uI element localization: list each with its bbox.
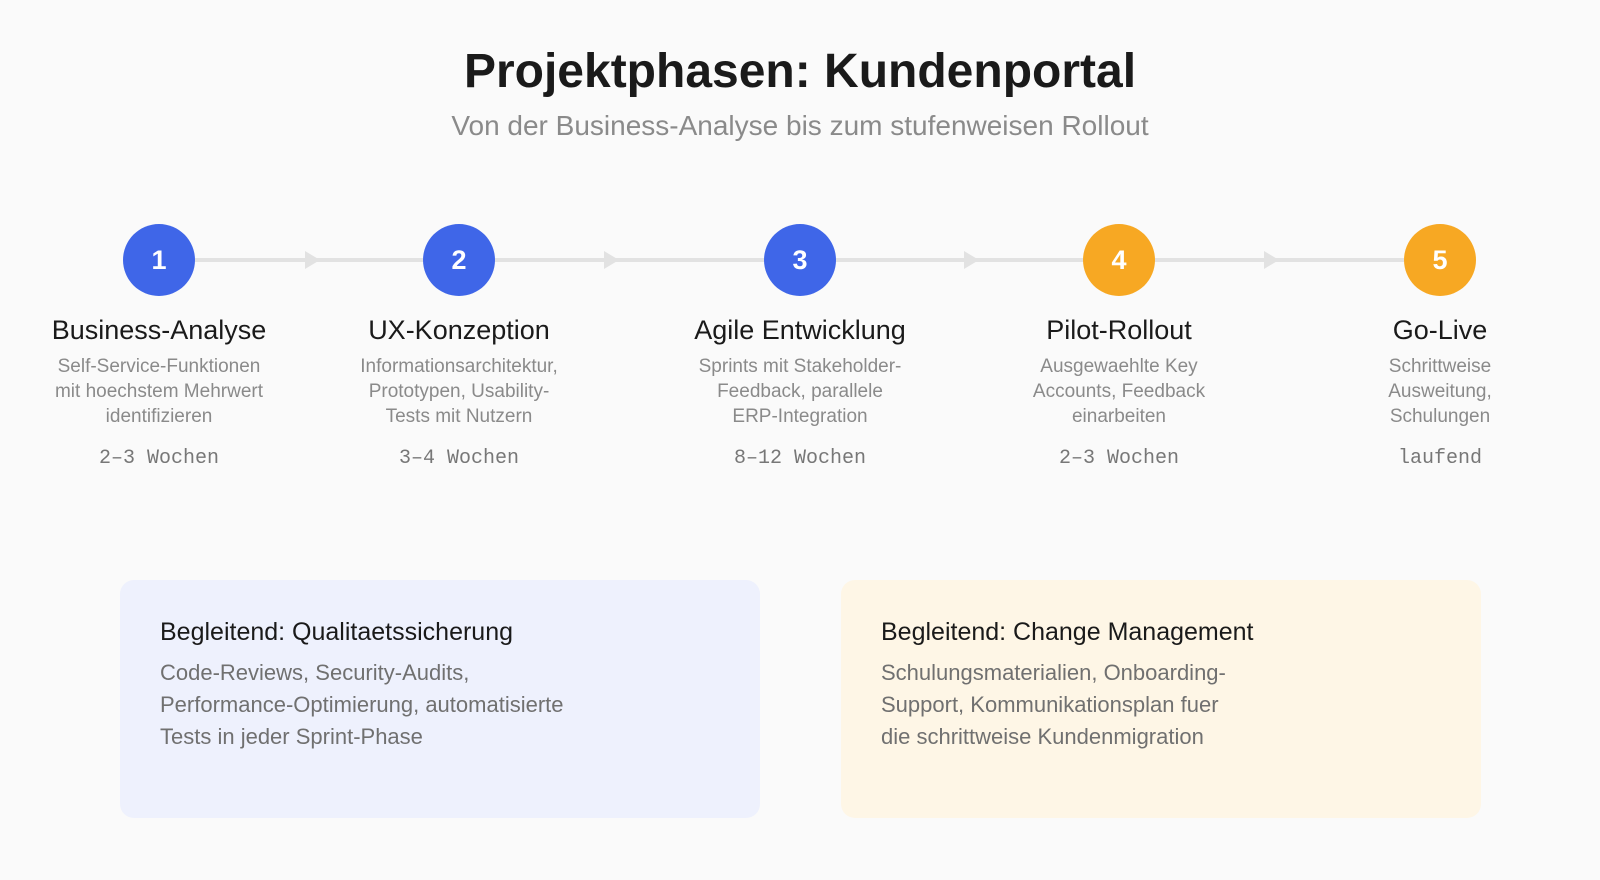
step 1: Business-Analyse <box>52 315 266 345</box>
circle 3: 3 <box>792 245 808 275</box>
step 3: Feedback, parallele <box>717 381 883 402</box>
step 4: Accounts, Feedback <box>1033 381 1205 402</box>
circle 1: 1 <box>151 245 167 275</box>
title: Projektphasen: Kundenportal <box>464 45 1136 98</box>
circle 5 <box>1404 224 1476 296</box>
subtitle: Von der Business-Analyse bis zum stufenweisen Rollout <box>451 110 1149 141</box>
step 2: Prototypen, Usability- <box>369 381 549 402</box>
step 2 <box>360 315 558 470</box>
step 1: mit hoechstem Mehrwert <box>55 381 263 402</box>
step 3: Agile Entwicklung <box>694 315 906 345</box>
panel: change management: Schulungsmaterialien, Onboarding-Support, Kommunikationsplan fuer die schrittweise Kundenmigration <box>881 660 1226 749</box>
step 2: Informationsarchitektur, <box>360 356 558 377</box>
step 5: Ausweitung, <box>1388 381 1492 402</box>
step 5: laufend <box>1398 447 1482 470</box>
circle 4: 4 <box>1111 245 1127 275</box>
circle 5: 5 <box>1432 245 1448 275</box>
step 3: 8–12 Wochen <box>734 447 866 470</box>
panel: change management: Begleitend: Change Management <box>881 618 1254 646</box>
step 3: Sprints mit Stakeholder- <box>699 356 901 377</box>
circle 2: 2 <box>451 245 467 275</box>
step 2: 3–4 Wochen <box>399 447 519 470</box>
timeline connector <box>195 251 1404 269</box>
circle 1 <box>123 224 195 296</box>
circle 4 <box>1083 224 1155 296</box>
step 5: Go-Live <box>1393 315 1487 345</box>
step 3: ERP-Integration <box>732 406 868 427</box>
circle 2 <box>423 224 495 296</box>
step 5: Schrittweise <box>1389 356 1491 377</box>
circle 3 <box>764 224 836 296</box>
panel: change management <box>841 580 1481 818</box>
step 5: Schulungen <box>1390 406 1490 427</box>
panel: quality assurance: Begleitend: Qualitaetssicherung <box>160 618 513 646</box>
step 4: 2–3 Wochen <box>1059 447 1179 470</box>
step 4: Ausgewaehlte Key <box>1040 356 1198 377</box>
panel: quality assurance <box>120 580 760 818</box>
step 4: einarbeiten <box>1072 406 1166 427</box>
step 2: UX-Konzeption <box>368 315 550 345</box>
step 1: identifizieren <box>106 406 212 427</box>
step 5 <box>1388 315 1492 470</box>
step 3 <box>694 315 906 470</box>
step 1: Self-Service-Funktionen <box>58 356 260 377</box>
step 1: 2–3 Wochen <box>99 447 219 470</box>
panel: quality assurance: Code-Reviews, Security-Audits, Performance-Optimierung, automatisierte Tests in jeder Sprint-Phase <box>160 660 564 749</box>
step 4 <box>1033 315 1205 470</box>
step 1 <box>52 315 266 470</box>
step 2: Tests mit Nutzern <box>386 406 532 427</box>
step 4: Pilot-Rollout <box>1046 315 1192 345</box>
